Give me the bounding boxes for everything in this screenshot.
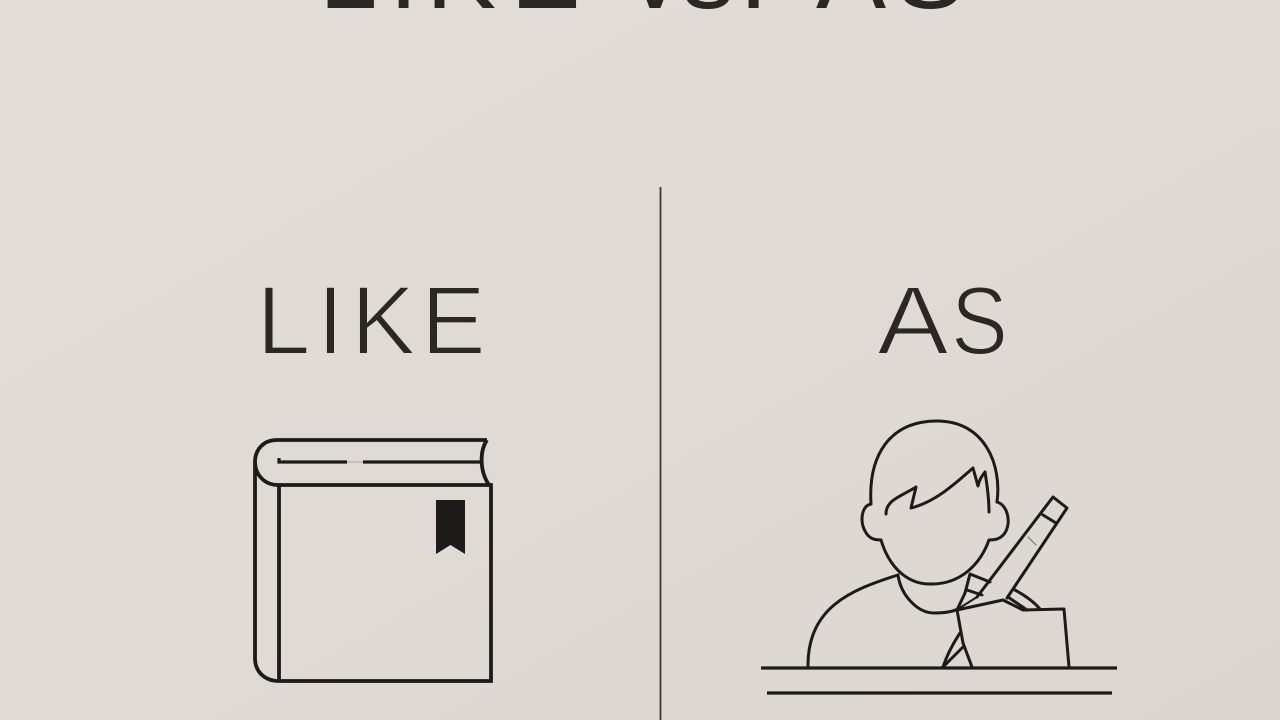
left ear [862,504,881,540]
desk lines [761,666,1117,670]
center divider [660,187,662,720]
heading: AS: A [877,266,949,375]
shoulder [808,575,898,667]
icon: bookmark [436,500,465,554]
pencil [977,497,1067,598]
right ear [989,502,1008,540]
hair [886,468,989,514]
pencil tip [943,633,963,667]
icon: person writing [761,421,1117,693]
collar [957,574,1040,610]
face outline [881,540,989,584]
neck [898,575,958,613]
hand [957,600,1069,667]
heading: AS [877,266,1008,375]
icon: book [255,440,491,681]
heading: LIKE: LIKE [256,266,486,375]
head [871,421,998,504]
heading: AS: S [951,267,1008,375]
